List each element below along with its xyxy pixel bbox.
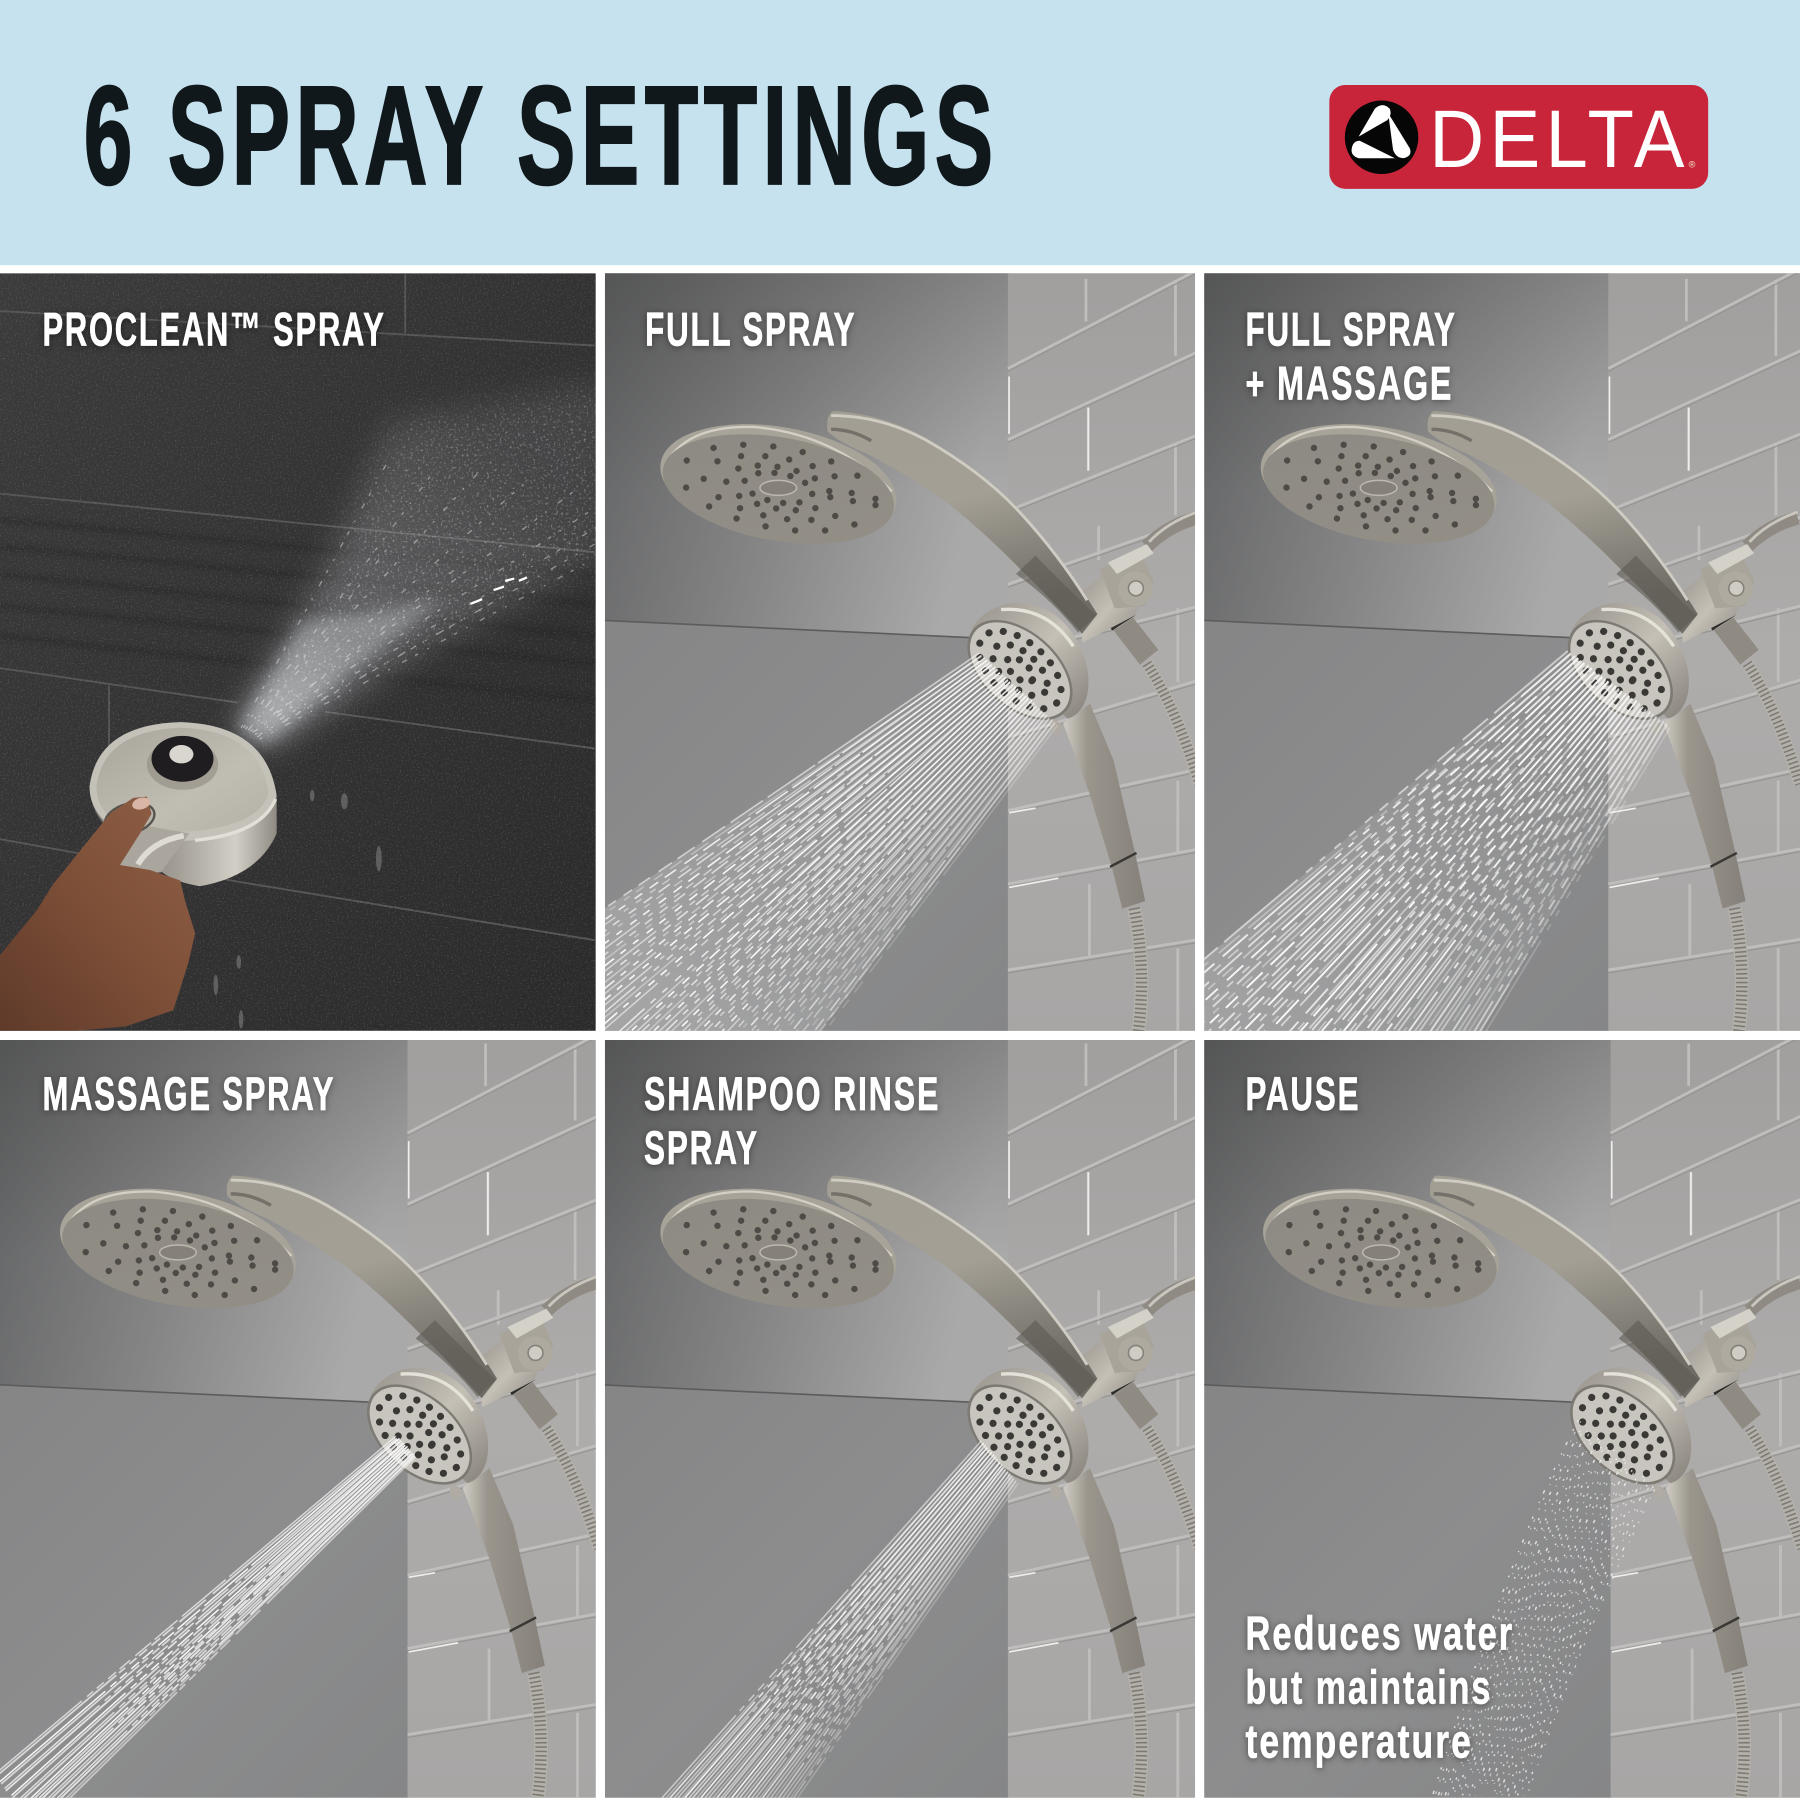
- water spray: [1204, 650, 1670, 1031]
- label: FULL SPRAY: [645, 303, 856, 356]
- description: temperature: [1246, 1715, 1473, 1768]
- label: FULL SPRAY: [1246, 303, 1457, 356]
- logo: Delta: ®: [1689, 160, 1696, 170]
- panel: Massage spray: [0, 1029, 608, 1800]
- label: MASSAGE SPRAY: [42, 1067, 335, 1120]
- shower fixture: [651, 407, 1200, 1037]
- label: [1244, 310, 1456, 404]
- description: Reduces water: [1246, 1607, 1514, 1660]
- label: + MASSAGE: [1246, 356, 1453, 409]
- water spray: [0, 1436, 416, 1800]
- description: [1246, 1607, 1514, 1768]
- label: PROCLEAN™ SPRAY: [42, 303, 386, 356]
- hand: [0, 796, 195, 1031]
- panel: Full spray: [593, 264, 1209, 1046]
- shower fixture: [51, 1172, 599, 1800]
- water spray: [660, 1441, 1018, 1800]
- label: [644, 1075, 940, 1168]
- shower handle device: [90, 722, 277, 886]
- panel: Full spray + massage: [1204, 273, 1800, 1031]
- water spray: [230, 365, 608, 755]
- logo: Delta: DELTA: [1429, 94, 1690, 185]
- panel: Shampoo rinse spray: [593, 1029, 1209, 1800]
- water spray: [593, 653, 1057, 1046]
- shower fixture: [651, 1172, 1200, 1800]
- water mist: [1433, 1420, 1657, 1797]
- title: 6 SPRAY SETTINGS: [84, 57, 999, 214]
- panel: ProClean spray: [0, 273, 608, 1031]
- shower fixture: [1254, 1172, 1800, 1800]
- header band: [0, 0, 1800, 265]
- label: SHAMPOO RINSE: [644, 1067, 940, 1120]
- wall droplets: [214, 790, 382, 1029]
- logo: Delta: [1329, 85, 1708, 189]
- label: SPRAY: [644, 1121, 759, 1174]
- label: PAUSE: [1246, 1067, 1360, 1120]
- panel: Pause: [1196, 1029, 1800, 1800]
- shower fixture: [1251, 407, 1800, 1037]
- description: but maintains: [1246, 1661, 1492, 1714]
